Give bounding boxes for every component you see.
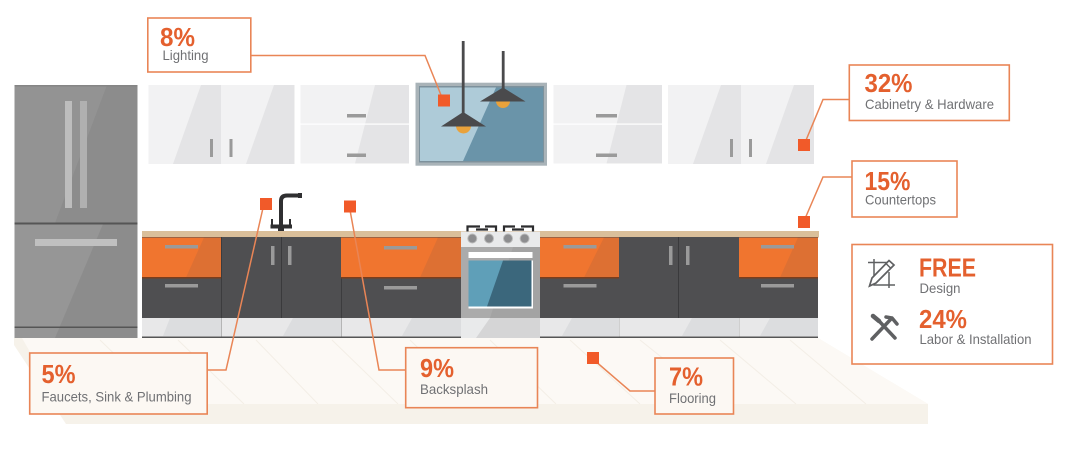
panel: free design and labor: Design <box>920 280 960 296</box>
callout: lighting: Lighting <box>162 47 208 63</box>
callout: flooring <box>587 352 734 414</box>
drawers centre <box>341 238 461 290</box>
oven knobs <box>468 234 529 243</box>
drawers right of oven <box>540 238 619 288</box>
drawers far right <box>739 238 818 288</box>
callout: cabinetry and hardware <box>798 65 1009 151</box>
upper cabinet 4 <box>668 85 814 164</box>
upper cabinet 2 <box>300 85 409 164</box>
oven <box>461 226 540 338</box>
panel: free design and labor <box>852 244 1052 364</box>
panel: free design and labor: 24% <box>919 304 967 334</box>
faucet <box>270 196 302 231</box>
callout: flooring: 7% <box>669 362 703 392</box>
doors left <box>221 237 342 318</box>
upper cabinet 1 <box>148 85 294 164</box>
icon: hammer and wrench <box>872 316 897 339</box>
panel: free design and labor: FREE <box>919 253 976 283</box>
window with pendant lights <box>416 41 547 166</box>
pendant lamp right <box>480 51 526 108</box>
oven burners <box>468 226 533 232</box>
callout: lighting: 8% <box>160 22 195 52</box>
drawers left <box>142 238 221 288</box>
callout: lighting <box>148 18 450 106</box>
callout: countertops: Countertops <box>865 192 936 208</box>
callout: faucets, sink and plumbing <box>30 198 272 414</box>
upper cabinet 3 <box>554 85 662 164</box>
callout: countertops <box>798 161 957 228</box>
oven window <box>468 260 533 308</box>
base cabinets <box>142 231 819 338</box>
floor <box>14 338 928 424</box>
doors right <box>669 237 690 318</box>
panel: free design and labor: Labor & Installation <box>920 331 1032 347</box>
icon: design crop and pencil <box>868 259 895 288</box>
callout: cabinetry and hardware: 32% <box>864 68 912 98</box>
callout: backsplash: Backsplash <box>420 381 488 397</box>
callout: countertops: 15% <box>864 166 910 196</box>
callout: faucets, sink and plumbing: 5% <box>42 359 76 389</box>
pendant lamp left <box>441 41 486 134</box>
callout: flooring: Flooring <box>669 390 716 406</box>
plinth <box>142 318 818 338</box>
callout: faucets, sink and plumbing: Faucets, Sink & Plumbing <box>42 388 192 404</box>
refrigerator <box>14 85 138 338</box>
callout: backsplash: 9% <box>420 353 454 383</box>
callout: backsplash <box>344 200 538 408</box>
callout: cabinetry and hardware: Cabinetry & Hardware <box>865 96 994 112</box>
